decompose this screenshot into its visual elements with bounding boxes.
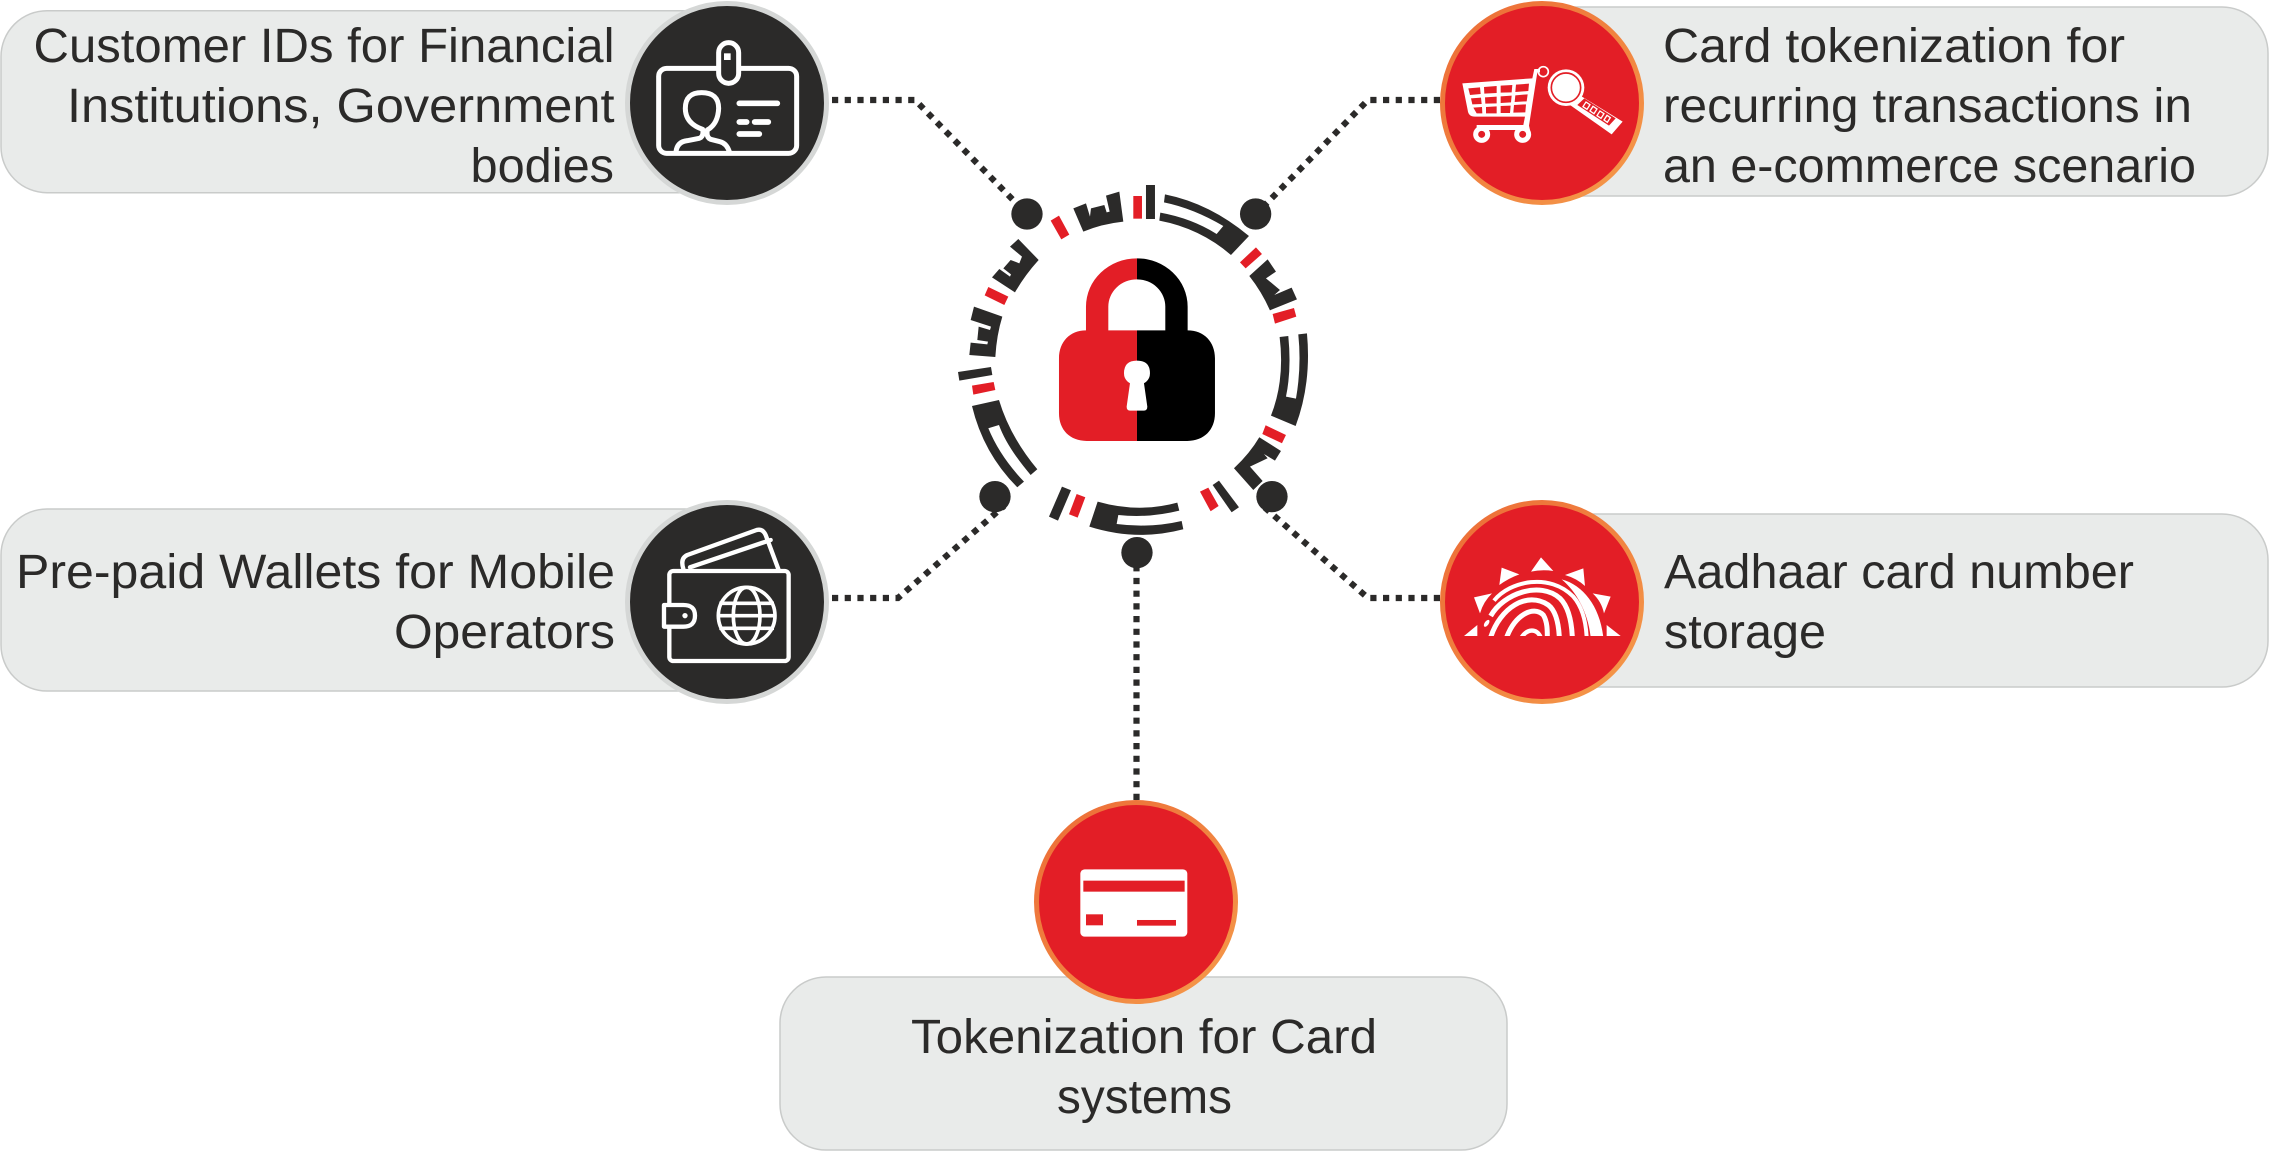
text: card tokenization — [1663, 20, 2196, 193]
text: wallets: Pre-paid Wallets for Mobile — [16, 546, 615, 599]
segmented ring — [958, 185, 1308, 535]
panel background — [1, 509, 761, 691]
panel: customer IDs — [1, 4, 826, 202]
text: aadhaar — [1664, 546, 2134, 659]
text: customer IDs: Customer IDs for Financial — [34, 20, 614, 73]
text: card tokenization: an e-commerce scenario — [1663, 140, 2196, 193]
text: card tokenization: recurring transactions in — [1663, 80, 2192, 133]
text: aadhaar: storage — [1664, 606, 1826, 659]
panel: card tokenization — [1442, 4, 2268, 202]
panel: card systems — [780, 802, 1507, 1150]
icon: ID badge — [628, 4, 826, 202]
icon: shopping cart with magnifier — [1442, 4, 1642, 202]
text: wallets: Operators — [394, 606, 615, 659]
connector: card systems to lock — [1133, 565, 1140, 800]
panel: aadhaar — [1442, 502, 2268, 702]
text: card systems: systems — [1057, 1071, 1232, 1124]
text: card systems: Tokenization for Card — [911, 1011, 1377, 1064]
connector: aadhaar to lock — [1263, 506, 1440, 598]
central lock emblem — [958, 185, 1308, 568]
text: aadhaar: Aadhaar card number — [1664, 546, 2134, 599]
icon: aadhaar sun fingerprint — [1442, 502, 1642, 702]
panel background — [1507, 7, 2268, 196]
icon: payment card — [1036, 802, 1236, 1002]
panel background — [1507, 514, 2268, 687]
panel: wallets — [1, 502, 826, 702]
text: card tokenization: Card tokenization for — [1663, 20, 2125, 73]
connector: wallets to lock — [832, 506, 1004, 598]
text: customer IDs: Institutions, Government — [67, 80, 614, 133]
connector: card tokenization to lock — [1265, 100, 1440, 205]
connector nodes — [979, 198, 1288, 568]
connector: customer IDs to lock — [832, 100, 1018, 205]
text: card systems — [911, 1011, 1377, 1124]
icon: padlock — [1059, 258, 1215, 441]
panel background — [780, 977, 1507, 1150]
icon: wallet with globe — [628, 502, 826, 702]
text: wallets — [16, 546, 615, 659]
text: customer IDs: bodies — [470, 140, 614, 193]
panel background — [1, 11, 761, 193]
text: customer IDs — [34, 20, 614, 193]
